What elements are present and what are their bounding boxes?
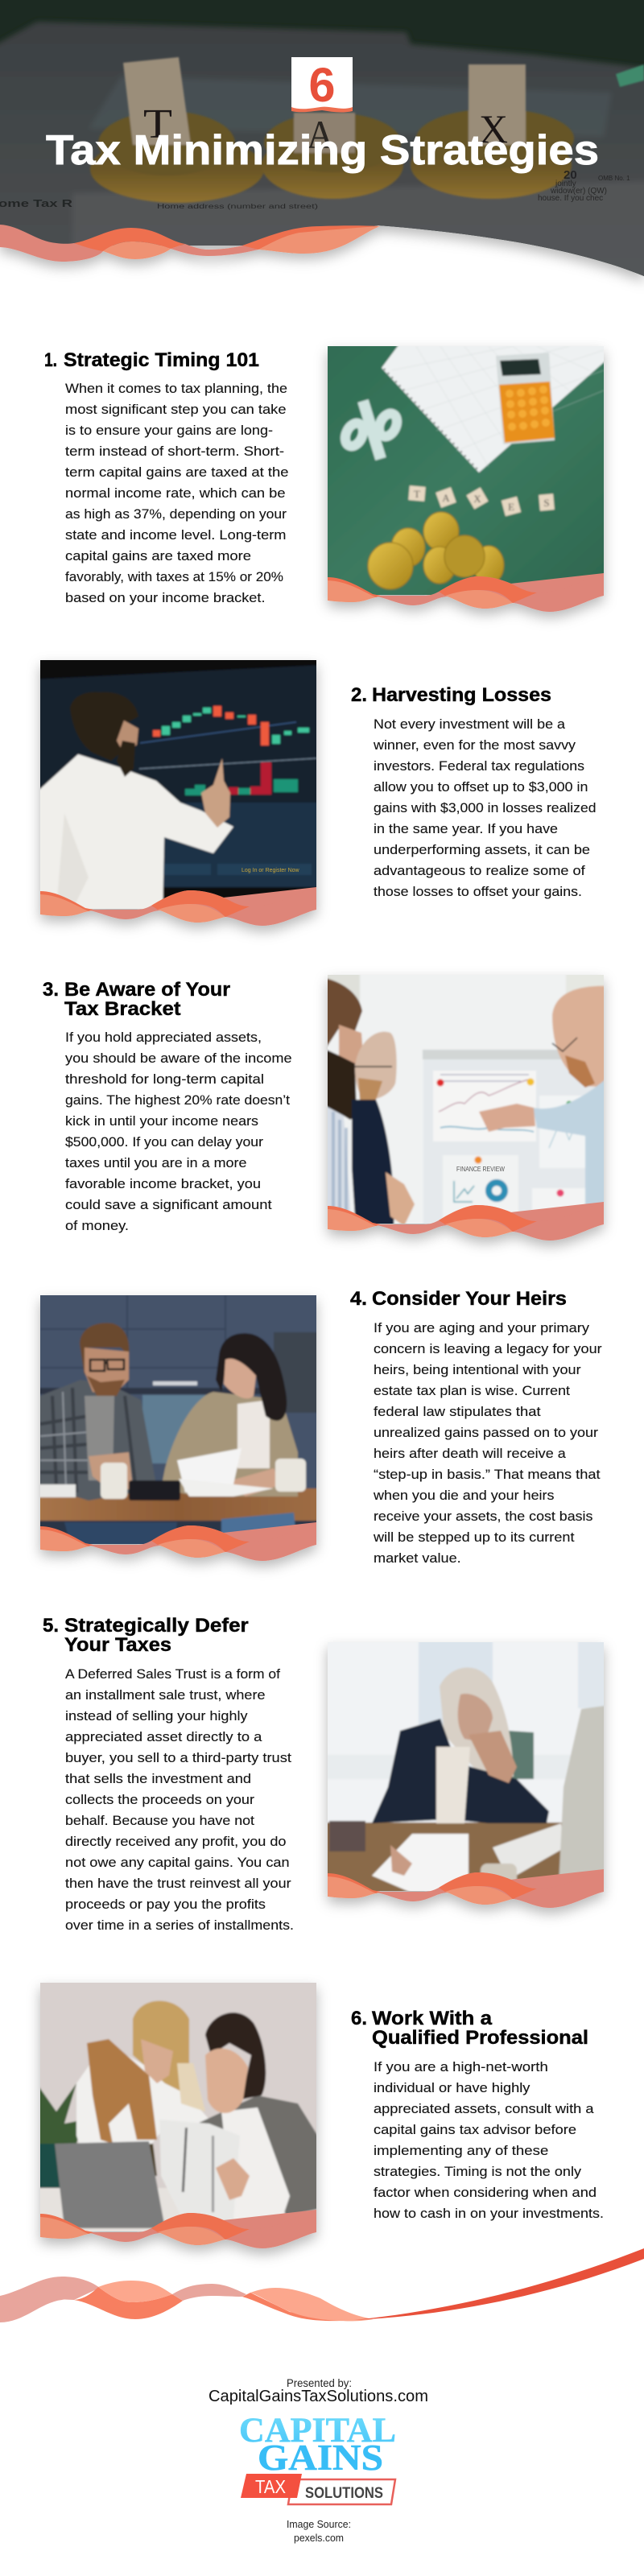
panel: photo 3 whiteboard meeting xyxy=(321,968,610,1241)
plant xyxy=(40,2083,79,2146)
heading: Work With a xyxy=(372,2008,492,2029)
body text: factor when considering when and xyxy=(374,2185,597,2200)
letter tiles: E xyxy=(508,501,514,513)
body text xyxy=(374,2059,604,2221)
body text: favorable income bracket, you xyxy=(65,1176,261,1191)
form text: house. If you chec xyxy=(538,194,603,203)
body text: “step-up in basis.” That means that xyxy=(374,1467,601,1482)
body text: $500,000. If you can delay your xyxy=(65,1134,263,1150)
image: tax coins on form xyxy=(0,0,644,286)
wave xyxy=(40,887,316,926)
heading xyxy=(351,2008,588,2049)
letter tiles: A xyxy=(442,492,450,504)
logo: GAINS xyxy=(258,2438,383,2478)
body text: gains. The highest 20% rate doesn’t xyxy=(65,1092,290,1108)
body text: when you die and your heirs xyxy=(373,1488,554,1503)
pins xyxy=(436,1079,444,1087)
image: three men at board xyxy=(321,968,610,1231)
woman xyxy=(161,1392,298,1496)
heading xyxy=(43,979,230,1020)
wood blocks xyxy=(123,57,191,145)
seated woman xyxy=(197,2095,323,2216)
body text: unrealized gains passed on to your xyxy=(374,1425,598,1440)
body text: If you are aging and your primary xyxy=(374,1320,590,1335)
form text: jointly xyxy=(555,180,576,188)
body text: kick in until your income nears xyxy=(65,1113,258,1129)
panel: photo 4 couple at table xyxy=(34,1289,323,1561)
footer: presented by xyxy=(208,2377,428,2405)
heading: Tax Bracket xyxy=(64,998,180,1020)
body text: how to cash in on your investments. xyxy=(374,2206,604,2221)
block letters: X xyxy=(479,106,508,151)
body text: normal income rate, which can be xyxy=(65,485,285,501)
body text: an installment sale trust, where xyxy=(65,1687,266,1703)
logo: CAPITAL xyxy=(239,2412,396,2450)
body text: implementing any of these xyxy=(374,2143,548,2158)
section 2: harvesting losses xyxy=(351,684,596,899)
body text: If you hold appreciated assets, xyxy=(65,1030,262,1045)
image: man at chart screen xyxy=(34,654,323,916)
body text: advantageous to realize some of xyxy=(374,863,585,878)
form text: Home address (number and street) xyxy=(157,203,319,210)
body text xyxy=(65,1666,294,1933)
section 4: heirs xyxy=(350,1288,602,1566)
image source credit: Image Source: xyxy=(287,2518,351,2530)
heading: 5. xyxy=(43,1615,59,1637)
heading: Harvesting Losses xyxy=(372,684,551,706)
body text xyxy=(65,1030,292,1233)
man xyxy=(34,1380,157,1501)
body text: gains with $3,000 in losses realized xyxy=(374,800,596,815)
image: calculator, percent sign, coins xyxy=(321,340,610,602)
coin stacks xyxy=(90,57,574,203)
body text: term capital gains are taxed at the xyxy=(65,464,288,480)
gold coins xyxy=(368,512,504,589)
body text: appreciated assets, consult with a xyxy=(374,2101,594,2116)
chart lines xyxy=(139,758,316,769)
wave xyxy=(328,1202,604,1241)
body text: taxes until you are in a more xyxy=(65,1155,246,1170)
body text: you should be aware of the income xyxy=(65,1051,292,1066)
desk xyxy=(328,1821,564,1891)
panel: photo 1 green desk with coins xyxy=(321,340,610,612)
body text: those losses to offset your gains. xyxy=(374,884,582,899)
body text: receive your assets, the cost basis xyxy=(374,1509,592,1524)
panel: photo 6 two women at laptop xyxy=(34,1976,323,2248)
header banner xyxy=(0,0,644,286)
laptop xyxy=(55,2141,165,2228)
heading: Qualified Professional xyxy=(372,2027,588,2049)
body text: heirs after death will receive a xyxy=(374,1446,566,1461)
body text: that sells the investment and xyxy=(65,1771,251,1786)
body text xyxy=(373,716,596,899)
panel: photo 2 trading screen xyxy=(34,654,323,926)
heading: 4. xyxy=(350,1288,367,1310)
body text: could save a significant amount xyxy=(65,1197,272,1212)
heading: Be Aware of Your xyxy=(64,979,230,1001)
section 3: tax bracket xyxy=(43,979,292,1233)
finance review: FINANCE REVIEW xyxy=(456,1166,505,1173)
wave xyxy=(40,1522,316,1561)
footer wave xyxy=(0,2248,644,2322)
heading: Consider Your Heirs xyxy=(372,1288,567,1310)
body text: individual or have highly xyxy=(374,2080,530,2095)
wave xyxy=(40,2210,316,2248)
section 5: defer taxes xyxy=(43,1615,294,1933)
body text: When it comes to tax planning, the xyxy=(65,381,287,396)
man xyxy=(34,754,233,916)
percent sign xyxy=(342,401,400,459)
body text: heirs, being intentional with your xyxy=(374,1362,581,1377)
image source credit: pexels.com xyxy=(294,2532,344,2544)
body text: term instead of short-term. Short- xyxy=(65,444,284,459)
letter tiles: T xyxy=(414,488,420,500)
image: couple with calculator xyxy=(34,1289,323,1551)
logo: SOLUTIONS xyxy=(305,2485,383,2502)
logo: TAX xyxy=(255,2476,286,2497)
body text: behalf. Because you have not xyxy=(65,1813,254,1828)
body text: of money. xyxy=(65,1218,129,1233)
section 1: strategic timing xyxy=(44,349,288,605)
image source credit xyxy=(287,2518,351,2544)
body text: most significant step you can take xyxy=(65,402,287,417)
red swoosh xyxy=(354,2248,644,2320)
body text: investors. Federal tax regulations xyxy=(374,758,584,774)
letter tiles xyxy=(408,485,555,516)
footer: presented by: Presented by: xyxy=(287,2377,352,2389)
body text: market value. xyxy=(374,1550,461,1566)
panel: photo 5 woman at desk xyxy=(321,1636,610,1908)
body text: threshold for long-term capital xyxy=(65,1071,264,1087)
body text: Not every investment will be a xyxy=(374,716,566,732)
form text: 20 xyxy=(564,168,577,182)
body text: then have the trust reinvest all your xyxy=(65,1876,291,1891)
header wave xyxy=(0,225,380,262)
heading xyxy=(43,1615,249,1656)
wave xyxy=(328,573,604,612)
body text: instead of selling your highly xyxy=(65,1708,248,1724)
body text: capital gains tax advisor before xyxy=(374,2122,576,2137)
body text: buyer, you sell to a third-party trust xyxy=(65,1750,291,1765)
body text: collects the proceeds on your xyxy=(65,1792,254,1807)
image: woman reading documents xyxy=(321,1636,610,1898)
body text: concern is leaving a legacy for your xyxy=(374,1341,602,1356)
body text: not owe any capital gains. You can xyxy=(65,1855,290,1870)
volume bars xyxy=(185,779,298,795)
heading: 3. xyxy=(43,979,59,1001)
header photo and wave xyxy=(0,0,644,286)
candles xyxy=(162,708,309,744)
form text xyxy=(0,168,630,210)
letter tiles: S xyxy=(543,497,550,509)
image: two colleagues reviewing paper xyxy=(34,1976,323,2239)
body text xyxy=(65,381,288,605)
body text: will be stepped up to its current xyxy=(373,1530,575,1545)
badge xyxy=(291,57,353,113)
body text: strategies. Timing is not the only xyxy=(374,2164,582,2179)
block letters: A xyxy=(307,112,334,157)
heading: 1. xyxy=(44,349,57,371)
blonde woman xyxy=(75,2056,208,2145)
heading: Your Taxes xyxy=(64,1634,171,1656)
section 6: qualified professional xyxy=(351,2008,604,2221)
form text: widow(er) (QW) xyxy=(550,187,607,196)
body text: capital gains are taxed more xyxy=(65,548,251,564)
body text xyxy=(373,1320,602,1566)
body text: over time in a series of installments. xyxy=(65,1918,294,1933)
body text: directly received any profit, you do xyxy=(65,1834,287,1849)
body text: favorably, with taxes at 15% or 20% xyxy=(65,569,283,584)
table xyxy=(34,1488,323,1521)
body text: as high as 37%, depending on your xyxy=(65,506,287,522)
logo xyxy=(239,2412,396,2504)
wave xyxy=(328,1869,604,1908)
body text: state and income level. Long-term xyxy=(65,527,287,543)
block letters: T xyxy=(143,101,172,147)
form text: OMB No. 1 xyxy=(598,175,630,182)
body text: underperforming assets, it can be xyxy=(374,842,590,857)
heading: Strategic Timing 101 xyxy=(64,349,259,371)
heading: 2. xyxy=(351,684,367,706)
title: Tax Minimizing Strategies xyxy=(46,127,599,174)
body text: estate tax plan is wise. Current xyxy=(374,1383,570,1398)
body text: appreciated asset directly to a xyxy=(65,1729,262,1744)
heading: Strategically Defer xyxy=(64,1615,249,1637)
body text: in the same year. If you have xyxy=(374,821,558,836)
people xyxy=(328,977,364,1048)
body text: federal law stipulates that xyxy=(374,1404,541,1419)
body text: is to ensure your gains are long- xyxy=(65,423,273,438)
body text: winner, even for the most savvy xyxy=(373,737,576,753)
body text: based on your income bracket. xyxy=(65,590,266,605)
badge number: 6 xyxy=(309,58,335,112)
board xyxy=(424,1059,594,1224)
body text: A Deferred Sales Trust is a form of xyxy=(65,1666,280,1682)
heading: 6. xyxy=(351,2008,367,2029)
block letters xyxy=(144,109,507,148)
mugs xyxy=(101,1463,127,1499)
body text: proceeds or pay you the profits xyxy=(65,1897,266,1912)
website: CapitalGainsTaxSolutions.com xyxy=(208,2388,428,2405)
screen caption: Log In or Register Now xyxy=(242,868,300,873)
body text: If you are a high-net-worth xyxy=(374,2059,548,2074)
body text: allow you to offset up to $3,000 in xyxy=(374,779,588,795)
letter tiles: X xyxy=(473,493,481,505)
